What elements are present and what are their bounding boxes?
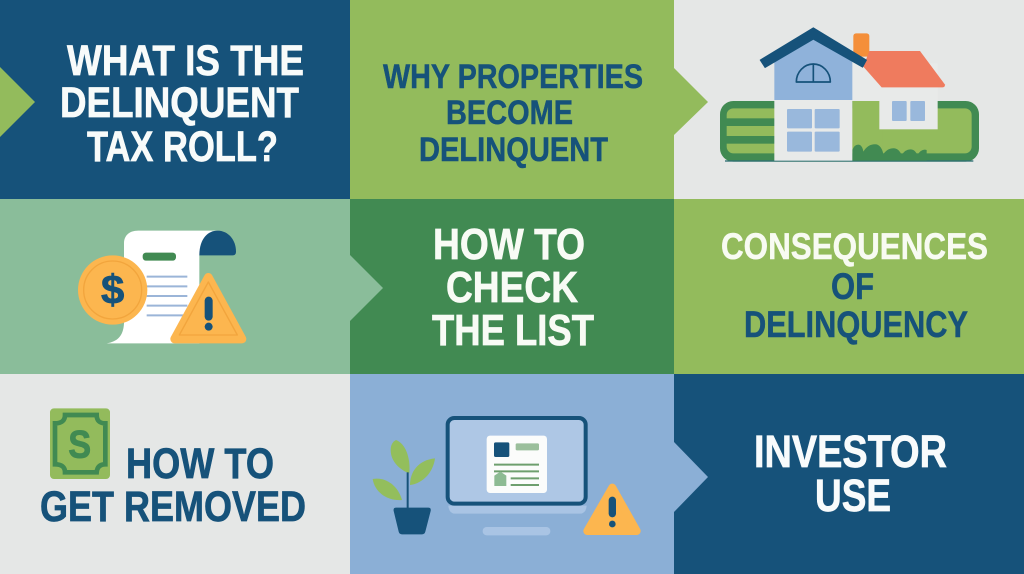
heading: investor use: INVESTOR xyxy=(754,426,947,477)
arrow: pale green panel to check list panel xyxy=(350,255,383,321)
heading: why properties become delinquent: DELINQUENT xyxy=(419,131,608,169)
heading: how to check the list: HOW TO xyxy=(433,220,585,269)
heading: why properties become delinquent xyxy=(383,58,643,169)
icon: tax bill scroll xyxy=(107,231,236,343)
heading: what is the delinquent tax roll xyxy=(60,37,304,171)
panel: tax bill illustration xyxy=(0,199,350,374)
heading: why properties become delinquent: WHY PROPERTIES xyxy=(383,58,643,96)
arrow: into first panel xyxy=(0,67,35,137)
icon: warning triangle xyxy=(587,488,637,531)
panel: what is the delinquent tax roll xyxy=(0,0,350,199)
heading: consequences of delinquency: DELINQUENCY xyxy=(744,304,968,345)
heading: how to check the list: CHECK xyxy=(446,263,578,312)
heading: what is the delinquent tax roll: WHAT IS THE xyxy=(67,37,304,85)
heading: how to get removed xyxy=(40,440,306,531)
panel: why properties become delinquent xyxy=(350,0,674,199)
heading: how to check the list xyxy=(432,220,594,355)
icon: computer monitor xyxy=(448,418,587,535)
heading: how to get removed: HOW TO xyxy=(126,440,274,488)
panel: house illustration xyxy=(674,0,1024,199)
heading: why properties become delinquent: BECOME xyxy=(446,94,573,132)
heading: how to check the list: THE LIST xyxy=(432,306,594,355)
icon: potted plant xyxy=(373,440,435,534)
panel: how to check the list xyxy=(350,199,674,374)
panel: online lookup illustration xyxy=(350,374,674,574)
icon: warning triangle xyxy=(175,277,242,339)
icon: dollar coin: $ xyxy=(101,266,125,312)
heading: how to get removed: GET REMOVED xyxy=(40,483,306,531)
panel: how to get removed xyxy=(0,374,350,574)
panel: investor use xyxy=(674,374,1024,574)
heading: what is the delinquent tax roll: DELINQUENT xyxy=(60,79,299,127)
heading: investor use xyxy=(754,426,947,521)
heading: consequences of delinquency xyxy=(721,226,988,345)
icon: dollar bill xyxy=(50,408,110,479)
icon: dollar coin xyxy=(78,255,147,325)
panel: consequences of delinquency xyxy=(674,199,1024,374)
heading: consequences of delinquency: OF xyxy=(831,266,874,307)
arrow: green panel to house panel xyxy=(674,68,708,135)
icon: dollar bill: S xyxy=(68,424,91,467)
heading: what is the delinquent tax roll: TAX ROLL? xyxy=(87,123,278,171)
arrow: blue panel to investor panel xyxy=(674,442,708,512)
heading: investor use: USE xyxy=(815,470,891,521)
icon: house xyxy=(720,28,979,162)
